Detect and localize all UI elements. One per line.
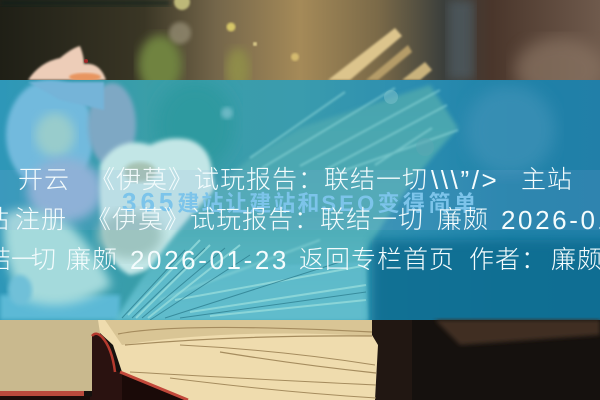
text line 1: 《伊莫》试玩报告： <box>90 166 324 194</box>
text line 3: 2026-01-23 <box>130 245 289 275</box>
text line 3: 返回专栏首页 <box>299 246 455 274</box>
top strip of the photo <box>0 0 600 102</box>
text line 3: 一 <box>11 246 37 274</box>
text line 2: 联结一切 <box>320 206 424 234</box>
book page fan <box>115 85 458 320</box>
blue band: tinted photo <box>0 80 600 340</box>
text line 1 <box>18 165 573 195</box>
flower centre <box>99 138 214 275</box>
lighter strip behind the watermark <box>0 170 600 230</box>
text line 2: 《伊莫》试玩报告： <box>86 206 320 234</box>
book right edge shading <box>365 236 600 320</box>
lavender shade <box>27 158 103 222</box>
watermark title: 365建站让建站和SEO变得简单 <box>122 187 479 217</box>
text line 1: \\\”/> <box>431 165 499 195</box>
flower upper left <box>6 80 94 190</box>
blue teal glow in centre <box>158 84 232 161</box>
text line 2: 廉颇 <box>437 206 489 234</box>
red book cover <box>84 333 122 400</box>
text line 3 <box>0 245 600 275</box>
text line 3: 廉颇 <box>66 246 118 274</box>
text line 3: 作者： <box>469 246 547 274</box>
flower lower left <box>3 209 112 305</box>
text line 3: 切 <box>31 246 57 274</box>
text line 1: 主站 <box>521 166 573 194</box>
text line 1: 联结一切 <box>324 166 428 194</box>
text line 2: 注册 <box>15 206 67 234</box>
book lower part <box>0 320 600 400</box>
left page <box>0 320 100 391</box>
page block <box>98 320 378 400</box>
text line 2 <box>0 205 600 235</box>
text line 1: 开云 <box>18 166 70 194</box>
